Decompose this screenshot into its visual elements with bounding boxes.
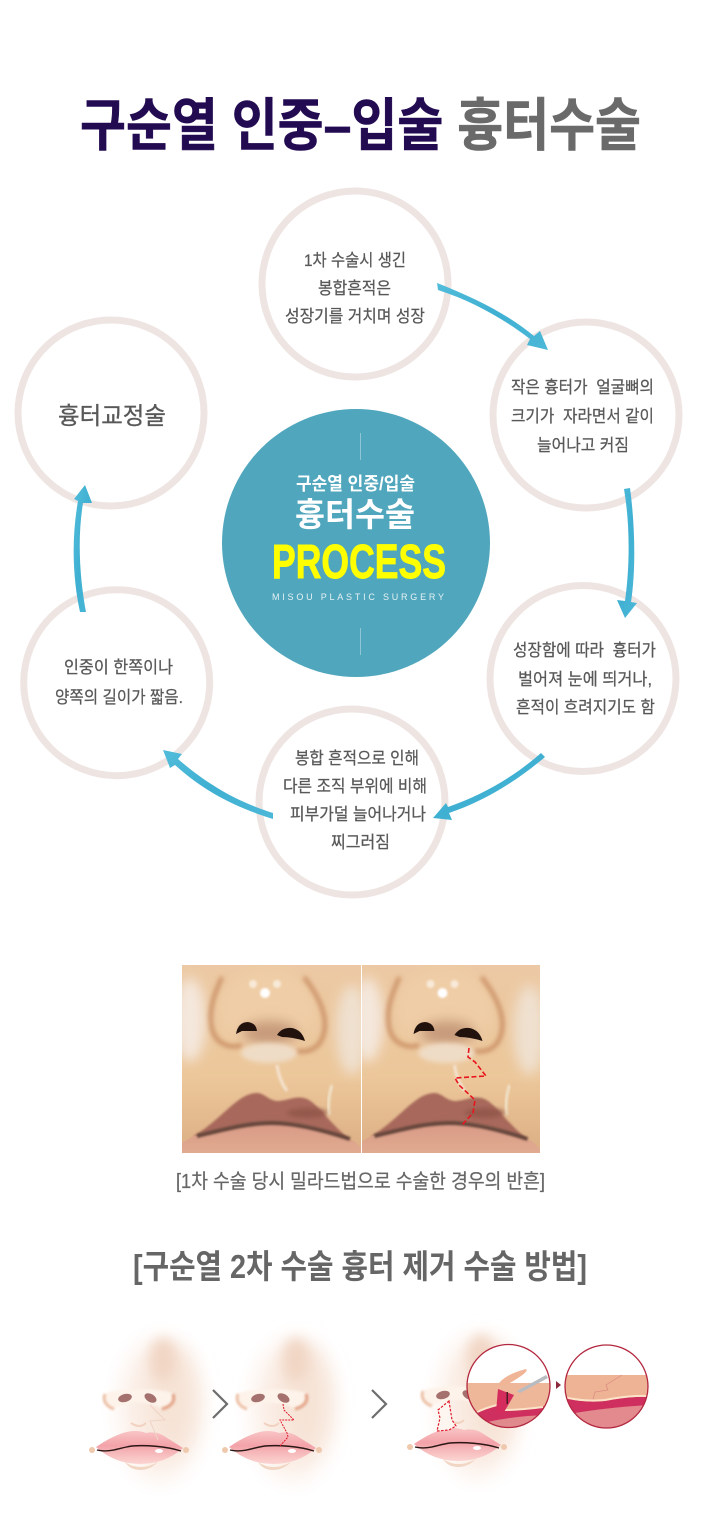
step 3 circle: 성장함에 따라 흉터가 xyxy=(513,641,656,660)
zoom circle: excision detail xyxy=(466,1344,551,1429)
center circle: 구순열 인중/입술 xyxy=(296,474,415,494)
step 2 circle: 크기가 자라면서 같이 xyxy=(511,407,654,426)
arrow: step 2 to 3 xyxy=(617,488,637,618)
step 3 circle: 흔적이 흐려지기도 함 xyxy=(516,698,655,717)
step 1 circle: 봉합흔적은 xyxy=(318,279,391,298)
zoom circle: healed result xyxy=(564,1344,649,1429)
step 2 circle: 작은 흉터가 얼굴뼈의 xyxy=(511,378,654,397)
illustration: step A face with scar xyxy=(89,1338,200,1480)
step 4 circle xyxy=(259,709,445,895)
step 5 circle: 양쪽의 길이가 짧음. xyxy=(55,688,183,707)
step 4 circle: 봉합 흔적으로 인해 xyxy=(295,749,419,768)
step 1 circle: 성장기를 거치며 성장 xyxy=(285,307,425,326)
center circle: 흉터수술 xyxy=(295,496,415,533)
step 4 circle: 다른 조직 부위에 비해 xyxy=(283,777,427,796)
arrow: step 1 to 2 xyxy=(437,283,548,350)
photo caption: [1차 수술 당시 밀라드법으로 수술한 경우의 반흔] xyxy=(176,1170,545,1193)
step 1 circle: 1차 수술시 생긴 xyxy=(304,251,406,270)
arrow: chevron B to C xyxy=(372,1390,386,1418)
step 2 circle: 늘어나고 커짐 xyxy=(537,436,629,455)
arrow: step 5 to 6 xyxy=(74,485,92,612)
step 6 circle xyxy=(18,320,204,506)
center circle: PROCESS xyxy=(272,536,446,589)
step 4 circle: 피부가덜 늘어나거나 xyxy=(290,805,426,824)
center circle xyxy=(222,409,490,677)
step 3 circle xyxy=(490,586,676,772)
arrow: step 3 to 4 xyxy=(433,753,545,820)
title: 구순열 인중–입술 흉터수술 xyxy=(80,94,641,158)
photo: before xyxy=(174,965,368,1153)
step 1 circle xyxy=(262,191,448,377)
illustration: step B face with dotted line xyxy=(222,1338,333,1480)
section heading: [구순열 2차 수술 흉터 제거 수술 방법] xyxy=(133,1248,587,1285)
process diagram xyxy=(18,191,679,895)
arrow: small triangle xyxy=(556,1381,561,1389)
step 3 circle: 벌어져 눈에 띄거나, xyxy=(518,670,652,689)
arrow: chevron A to B xyxy=(213,1390,227,1418)
arrow: step 4 to 5 xyxy=(163,750,273,819)
step 5 circle xyxy=(24,590,210,776)
step 6 circle: 흉터교정술 xyxy=(58,403,166,430)
center circle: MISOU PLASTIC SURGERY xyxy=(272,592,444,602)
photo: after with red incision line xyxy=(352,965,546,1153)
step 5 circle: 인중이 한쪽이나 xyxy=(64,658,173,677)
step 2 circle xyxy=(493,322,679,508)
illustration: step C face with excision outline xyxy=(407,1335,518,1477)
step 4 circle: 찌그러짐 xyxy=(331,833,390,852)
